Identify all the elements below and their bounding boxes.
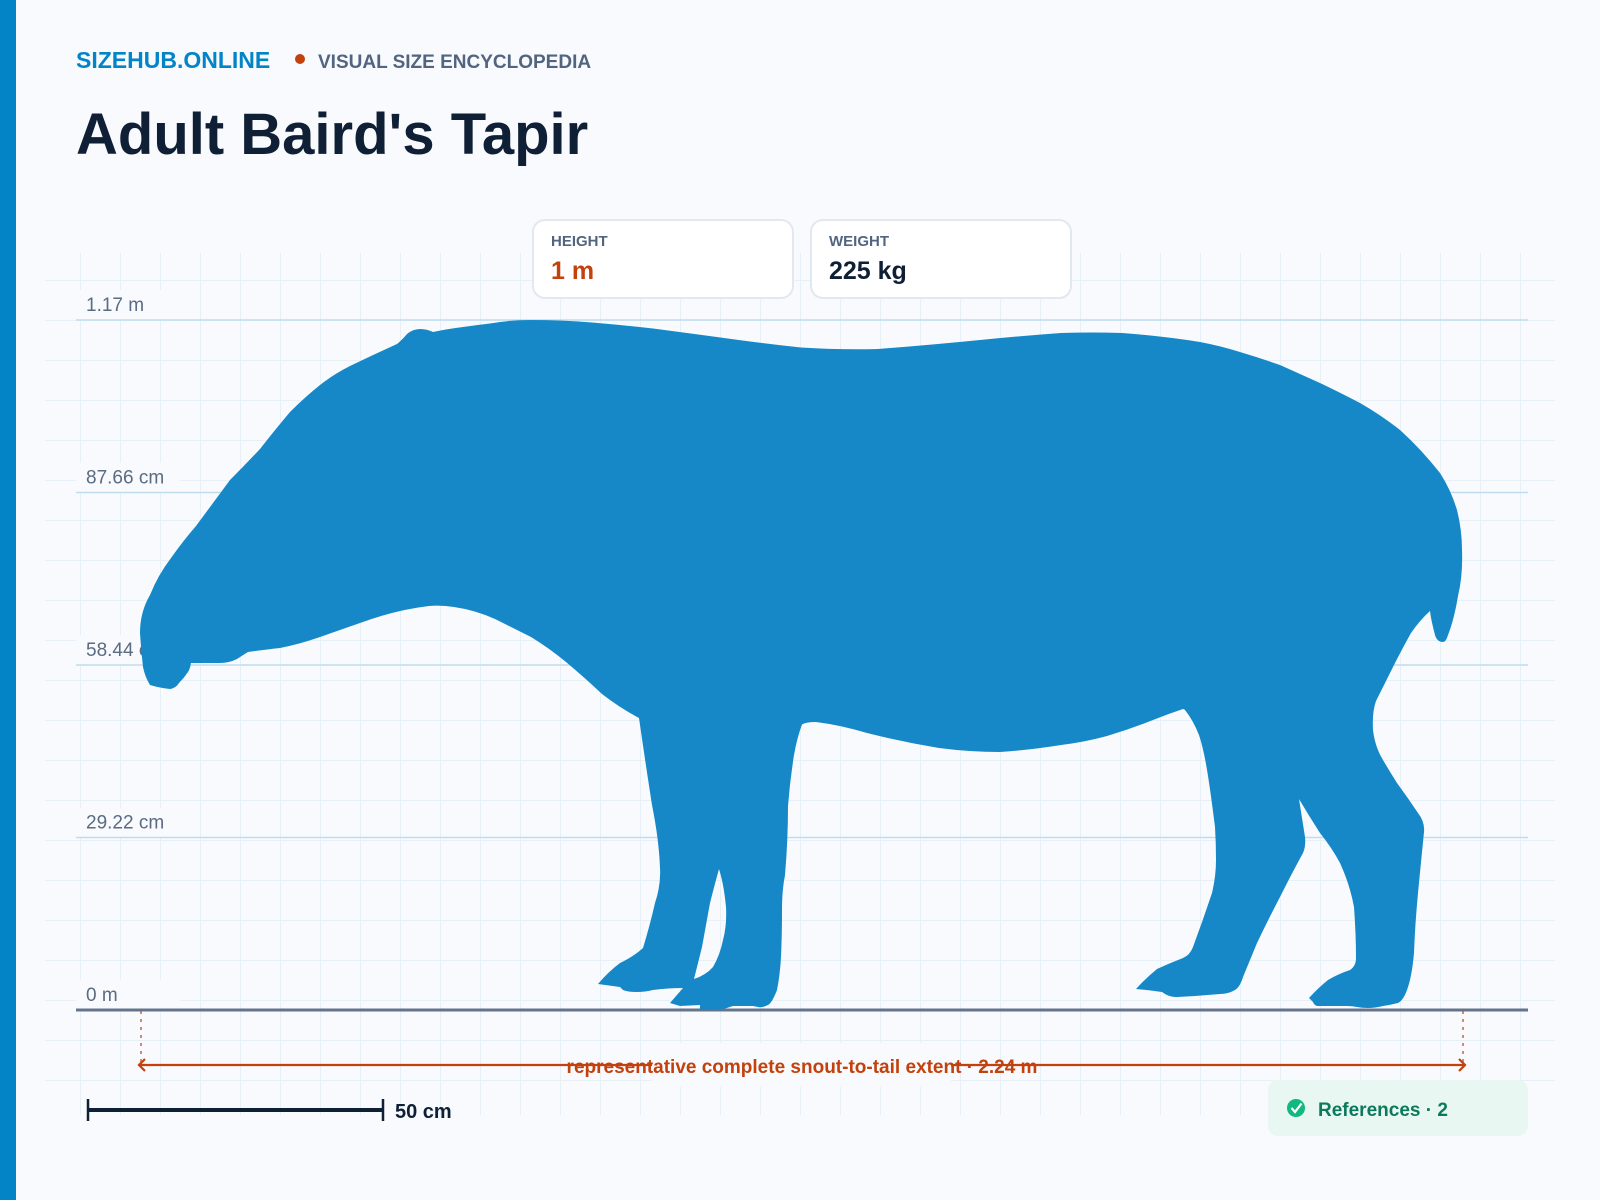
- stat card: weight: WEIGHT: [829, 233, 889, 250]
- axis labels: 1.17 m: [86, 295, 144, 316]
- references chip: [1268, 1080, 1528, 1136]
- extent arrow: [139, 1059, 1465, 1071]
- mask behind extent label: [652, 1043, 951, 1087]
- header tagline: VISUAL SIZE ENCYCLOPEDIA: [318, 52, 591, 73]
- axis labels: 29.22 cm: [86, 812, 164, 834]
- references chip: References · 2: [1318, 1100, 1448, 1121]
- stat card: weight: 225 kg: [829, 257, 907, 285]
- axis labels: 58.44 cm: [86, 640, 164, 661]
- stat card: height: [533, 220, 793, 298]
- extent dotted guides: [141, 1011, 1463, 1064]
- tapir silhouette: [140, 320, 1462, 1010]
- scale bar: 50 cm: [395, 1101, 452, 1123]
- header brand: SIZEHUB.ONLINE: [76, 47, 270, 73]
- icon: check badge: [1287, 1099, 1305, 1117]
- extent label: representative complete snout-to-tail extent · 2.24 m: [567, 1057, 1037, 1078]
- title: Adult Baird's Tapir: [76, 102, 588, 167]
- axis labels: 87.66 cm: [86, 468, 164, 488]
- stat card: height: 1 m: [551, 257, 594, 285]
- height axis lines: [76, 320, 1528, 838]
- axis labels: [86, 295, 164, 1006]
- stat card: height: HEIGHT: [551, 233, 608, 250]
- header dot: [295, 54, 305, 64]
- masks behind axis labels: [76, 290, 180, 1009]
- stat card: weight: [811, 220, 1071, 298]
- left accent bar: [0, 0, 16, 1200]
- axis labels: 0 m: [86, 985, 118, 1006]
- ground line: [76, 1008, 1528, 1012]
